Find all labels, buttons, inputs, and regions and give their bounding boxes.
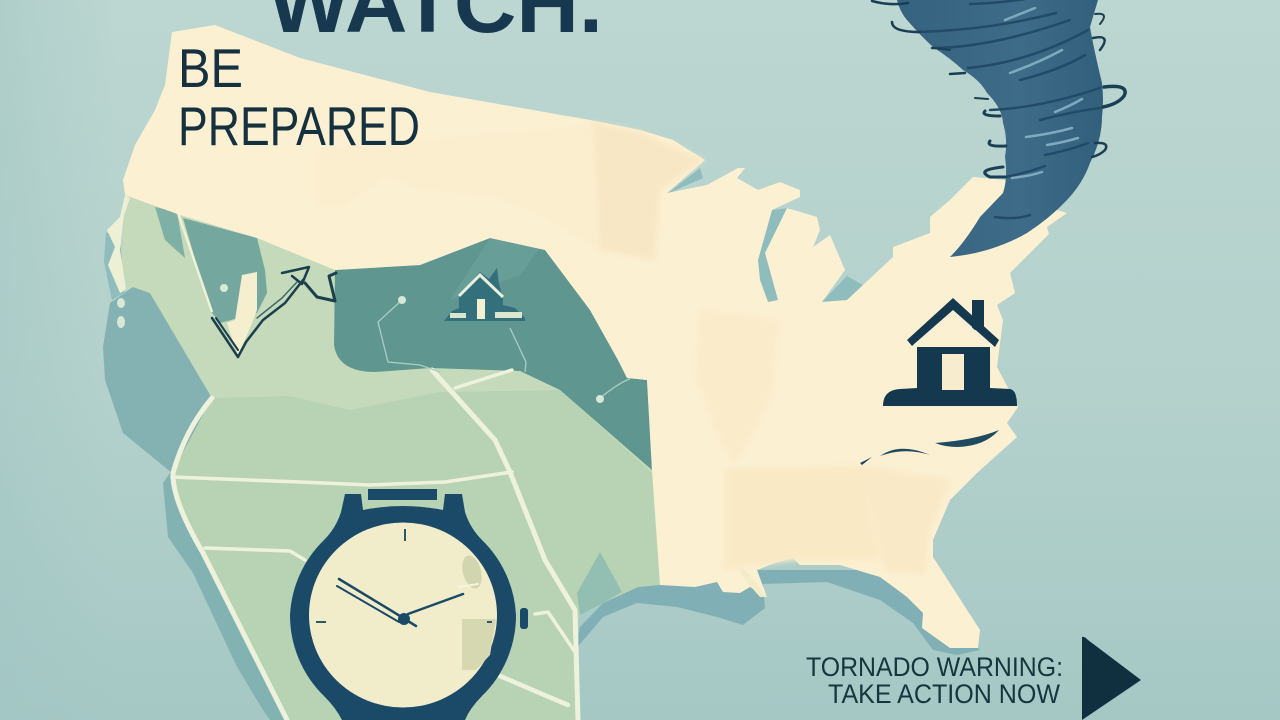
state shading — [315, 122, 950, 575]
watch strap bar — [368, 489, 437, 500]
gulf coast shadow — [575, 570, 980, 655]
subtitle: be prepared: BE — [178, 37, 243, 99]
wave under house — [860, 430, 999, 465]
subtitle: be prepared: PREPARED — [178, 95, 420, 157]
arrow doodle — [212, 267, 336, 357]
light swirl streaks — [1005, 8, 1082, 178]
icon: small house — [444, 268, 525, 321]
location dots — [117, 284, 604, 403]
coast lights — [107, 195, 130, 293]
watch hands — [337, 579, 478, 626]
icon: large house — [883, 298, 1017, 406]
white roads — [172, 370, 578, 720]
green western states — [120, 195, 660, 720]
warning text: TAKE ACTION NOW — [828, 679, 1060, 709]
watch tick marks — [316, 529, 492, 622]
road divider — [178, 213, 212, 312]
cream landmass — [123, 25, 1067, 648]
dark teal state patches — [155, 207, 185, 258]
watch face — [309, 522, 497, 708]
shade band beside the road — [163, 470, 290, 720]
western coast shade — [104, 232, 125, 300]
thin route lines in watch zone — [378, 300, 630, 398]
warning text: TORNADO WARNING: — [806, 652, 1063, 682]
tornado funnel — [897, 0, 1103, 257]
outer swirl hooks — [872, 1, 1125, 177]
arrow: play triangle — [1082, 637, 1141, 720]
teal triangle near gulf — [577, 552, 622, 615]
icon: wristwatch — [290, 489, 528, 720]
map of the United States — [103, 25, 1067, 720]
lighter northern green — [120, 195, 660, 480]
dark swirl bands — [917, 0, 1100, 218]
coastal teal blob — [103, 287, 212, 473]
watch crown — [520, 608, 528, 629]
watch lugs and case — [290, 494, 516, 720]
dark teal tornado watch zone — [334, 238, 652, 470]
lake shadows — [667, 168, 868, 302]
florida panhandle tip — [737, 565, 767, 597]
warning text — [806, 652, 1063, 709]
subtitle: be prepared — [178, 37, 420, 157]
tornado — [872, 0, 1125, 257]
cream blob in west — [227, 272, 257, 356]
